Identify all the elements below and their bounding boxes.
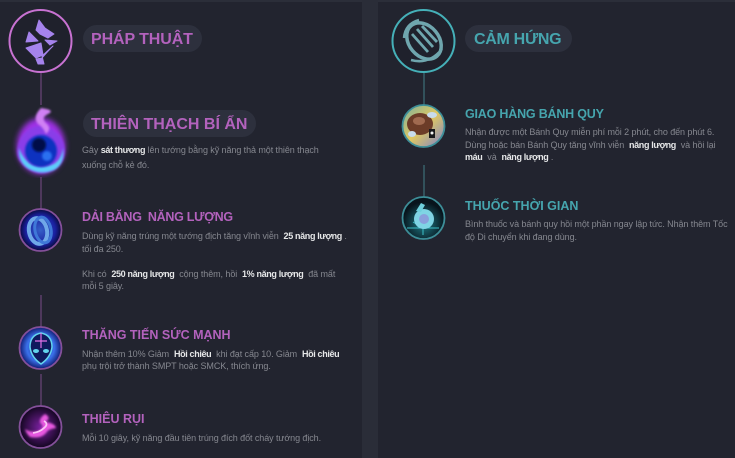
text: Thăng Tiến Sức Mạnh description bbox=[82, 348, 339, 371]
heading pill: Cảm Hứng bbox=[465, 25, 572, 52]
icon: Thiên Thạch Bí Ẩn blue flame bbox=[12, 106, 70, 178]
text: Dải Băng Năng Lượng description bbox=[82, 230, 347, 291]
text: Thiên Thạch Bí Ẩn description bbox=[82, 144, 319, 170]
heading pill: Pháp Thuật bbox=[83, 25, 202, 52]
text: Giao Hàng Bánh Quy description bbox=[465, 126, 715, 162]
heading: Thiêu Rụi: THIÊU RỤI bbox=[82, 412, 144, 426]
icon: Cảm Hứng emblem bbox=[392, 9, 456, 73]
icon: Thuốc Thời Gian potion bbox=[402, 196, 446, 240]
icon: Thăng Tiến Sức Mạnh mask bbox=[18, 326, 62, 370]
text: Dải Băng Năng Lượng description: Dùng kỹ năng trúng một tướng địch tăng vĩnh viễn 25 năng lượng . bbox=[82, 231, 347, 241]
icon: Thiêu Rụi purple fire bbox=[18, 405, 62, 449]
heading: Thăng Tiến Sức Mạnh: THĂNG TIẾN SỨC MẠNH bbox=[82, 328, 231, 342]
heading: Thuốc Thời Gian: THUỐC THỜI GIAN bbox=[465, 199, 578, 213]
text: Thiêu Rụi description: Mỗi 10 giây, kỹ năng đầu tiên trúng đích đốt cháy tướng địch. bbox=[82, 432, 321, 442]
text: Thăng Tiến Sức Mạnh description: Nhận thêm 10% Giảm Hồi chiêu khi đạt cấp 10. Giảm Hồi chiêu bbox=[82, 348, 339, 358]
icon: Dải Băng Năng Lượng ring bbox=[18, 208, 62, 252]
text: Dải Băng Năng Lượng description: Khi có 250 năng lượng cộng thêm, hồi 1% năng lượng đã mất bbox=[82, 269, 335, 279]
heading pill: Thiên Thạch Bí Ẩn bbox=[83, 110, 256, 137]
text: Thiên Thạch Bí Ẩn description: Gây sát thương lên tướng bằng kỹ năng thả một thiên thạch bbox=[82, 145, 319, 155]
icon: Giao Hàng Bánh Quy cookie bbox=[402, 104, 446, 148]
text: Dải Băng Năng Lượng description: mỗi 5 giây. bbox=[82, 281, 124, 291]
heading: Pháp Thuật: PHÁP THUẬT bbox=[91, 31, 193, 48]
heading: Dải Băng Năng Lượng: DẢI BĂNG NĂNG LƯỢNG bbox=[82, 210, 233, 224]
text: Giao Hàng Bánh Quy description: máu và năng lượng . bbox=[465, 152, 553, 162]
text: Giao Hàng Bánh Quy description: Nhận được một Bánh Quy miễn phí mỗi 2 phút, cho đến phút 6. bbox=[465, 127, 714, 137]
text: Dải Băng Năng Lượng description: tối đa 250. bbox=[82, 244, 123, 254]
text: Thuốc Thời Gian description: Bình thuốc và bánh quy hồi một phần ngay lập tức. Nhận thêm Tốc bbox=[465, 219, 728, 229]
text: Thuốc Thời Gian description: độ Di chuyển khi đang dùng. bbox=[465, 232, 577, 242]
text: Thuốc Thời Gian description bbox=[465, 219, 728, 242]
heading: Thiên Thạch Bí Ẩn: THIÊN THẠCH BÍ ẨN bbox=[91, 116, 247, 133]
text: Thăng Tiến Sức Mạnh description: phụ trội trở thành SMPT hoặc SMCK, thích ứng. bbox=[82, 361, 271, 371]
heading: Giao Hàng Bánh Quy: GIAO HÀNG BÁNH QUY bbox=[465, 107, 604, 121]
text: Thiên Thạch Bí Ẩn description: xuống chỗ kẻ đó. bbox=[82, 160, 149, 170]
heading: Cảm Hứng: CẢM HỨNG bbox=[474, 31, 561, 48]
text: Giao Hàng Bánh Quy description: Dùng hoặc bán Bánh Quy tăng vĩnh viễn năng lượng và hồi lại bbox=[465, 140, 715, 150]
icon: Pháp Thuật sorcery emblem bbox=[8, 9, 72, 73]
